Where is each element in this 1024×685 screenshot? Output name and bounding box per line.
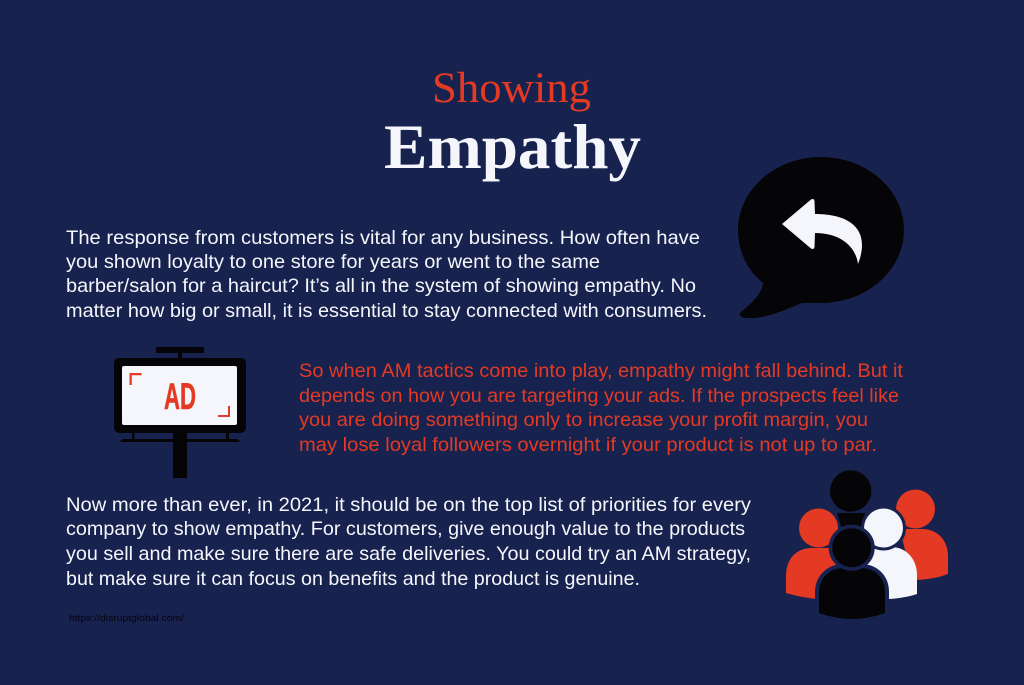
text block: AM tactics: you are doing something only to increase your profit margin, you [299,409,868,431]
text block: priorities in 2021: Now more than ever, in 2021, it should be on the top list of priorities for every [66,494,751,516]
source link: https://disruptglobal.com/ [69,613,185,623]
icon: AD billboard: AD [164,376,196,417]
icon: speech bubble with reply arrow [738,157,904,318]
text block: priorities in 2021: but make sure it can focus on benefits and the product is genuine. [66,568,640,590]
text block: AM tactics: depends on how you are targeting your ads. If the prospects feel like [299,385,899,407]
title: Showing [432,65,591,112]
text block: customer response: matter how big or small, it is essential to stay connected with consumers. [66,300,707,322]
icon: group of people [786,470,948,619]
title: Empathy [384,112,641,182]
text block: priorities in 2021: company to show empathy. For customers, give enough value to the products [66,518,745,540]
text block: customer response [66,227,707,322]
icon: AD billboard [114,347,246,478]
text block: priorities in 2021 [66,494,751,590]
text block: priorities in 2021: you sell and make sure there are safe deliveries. You could try an AM strategy, [66,543,751,565]
text block: customer response: barber/salon for a haircut? It’s all in the system of showing empathy. No [66,275,696,297]
text block: AM tactics: may lose loyal followers overnight if your product is not up to par. [299,434,877,456]
text block: AM tactics: So when AM tactics come into play, empathy might fall behind. But it [299,360,904,382]
text block: customer response: The response from customers is vital for any business. How often have [66,227,700,249]
text block: customer response: you shown loyalty to one store for years or went to the same [66,251,600,273]
title [384,65,641,182]
text block: AM tactics [299,360,904,456]
